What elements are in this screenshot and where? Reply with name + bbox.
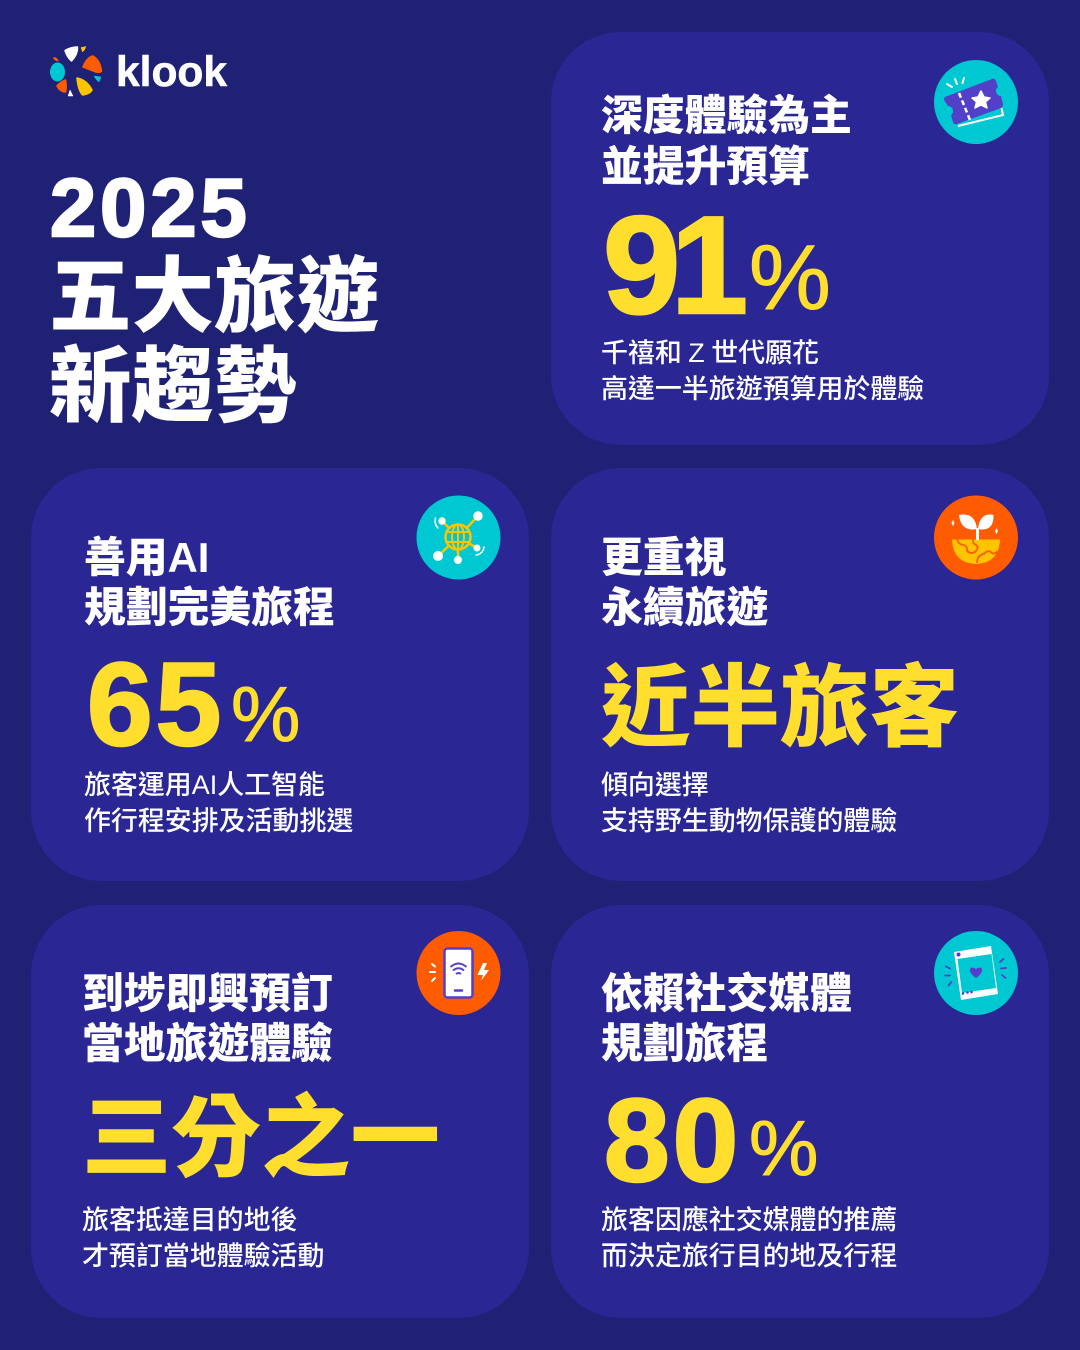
- icon: klook petals: [50, 46, 102, 96]
- stat percent sign: %: [749, 1104, 818, 1192]
- heading: 更重視: [601, 534, 726, 581]
- heading line 2: 並提升預算: [601, 143, 810, 190]
- stat percent sign: %: [231, 670, 300, 758]
- stat: one third: 三分之一: [82, 1088, 440, 1188]
- description: 旅客運用AI人工智能: [84, 770, 325, 800]
- heading: 善用AI: [84, 534, 209, 581]
- description line 2: 而決定旅行目的地及行程: [601, 1241, 897, 1271]
- stat: nearly half of travellers: 近半旅客: [601, 658, 959, 758]
- icon: ticket: [934, 60, 1018, 144]
- title line 2: 五大旅遊: [49, 251, 379, 343]
- heading: 到埗即興預訂: [82, 970, 333, 1017]
- description: 旅客抵達目的地後: [82, 1205, 298, 1235]
- stat: 80: 80: [604, 1075, 741, 1207]
- icon: social photo post: [934, 931, 1018, 1015]
- icon: AI globe network: [416, 496, 500, 580]
- panel: social media: [551, 905, 1049, 1318]
- description line 2: 作行程安排及活動挑選: [84, 806, 353, 836]
- panel: experiences: [551, 32, 1049, 445]
- heading line 2: 規劃完美旅程: [84, 584, 335, 631]
- description: 旅客因應社交媒體的推薦: [601, 1205, 897, 1235]
- heading line 2: 當地旅遊體驗: [82, 1020, 333, 1067]
- stat percent sign: %: [749, 227, 831, 329]
- description: 傾向選擇: [601, 770, 709, 800]
- stat: 91: 91: [603, 188, 739, 343]
- title: [49, 161, 379, 433]
- logo wordmark: klook: [116, 49, 227, 96]
- heading: 深度體驗為主: [601, 92, 852, 139]
- panel: AI planning: [31, 468, 529, 881]
- description: 千禧和 Z 世代願花: [601, 338, 819, 368]
- description line 2: 才預訂當地體驗活動: [82, 1241, 324, 1271]
- title year: 2025: [50, 161, 251, 254]
- description line 2: 支持野生動物保護的體驗: [601, 806, 897, 836]
- stat: 65: 65: [87, 639, 224, 771]
- heading line 2: 永續旅遊: [601, 584, 768, 631]
- heading: 依賴社交媒體: [601, 970, 852, 1017]
- icon: sprout on globe: [934, 496, 1018, 580]
- panel: last-minute booking: [31, 905, 529, 1318]
- title line 3: 新趨勢: [49, 341, 296, 433]
- heading line 2: 規劃旅程: [601, 1020, 768, 1067]
- icon: phone with wifi: [416, 931, 500, 1015]
- klook logo: [50, 46, 228, 96]
- description line 2: 高達一半旅遊預算用於體驗: [601, 374, 924, 404]
- panel: sustainability: [551, 468, 1049, 881]
